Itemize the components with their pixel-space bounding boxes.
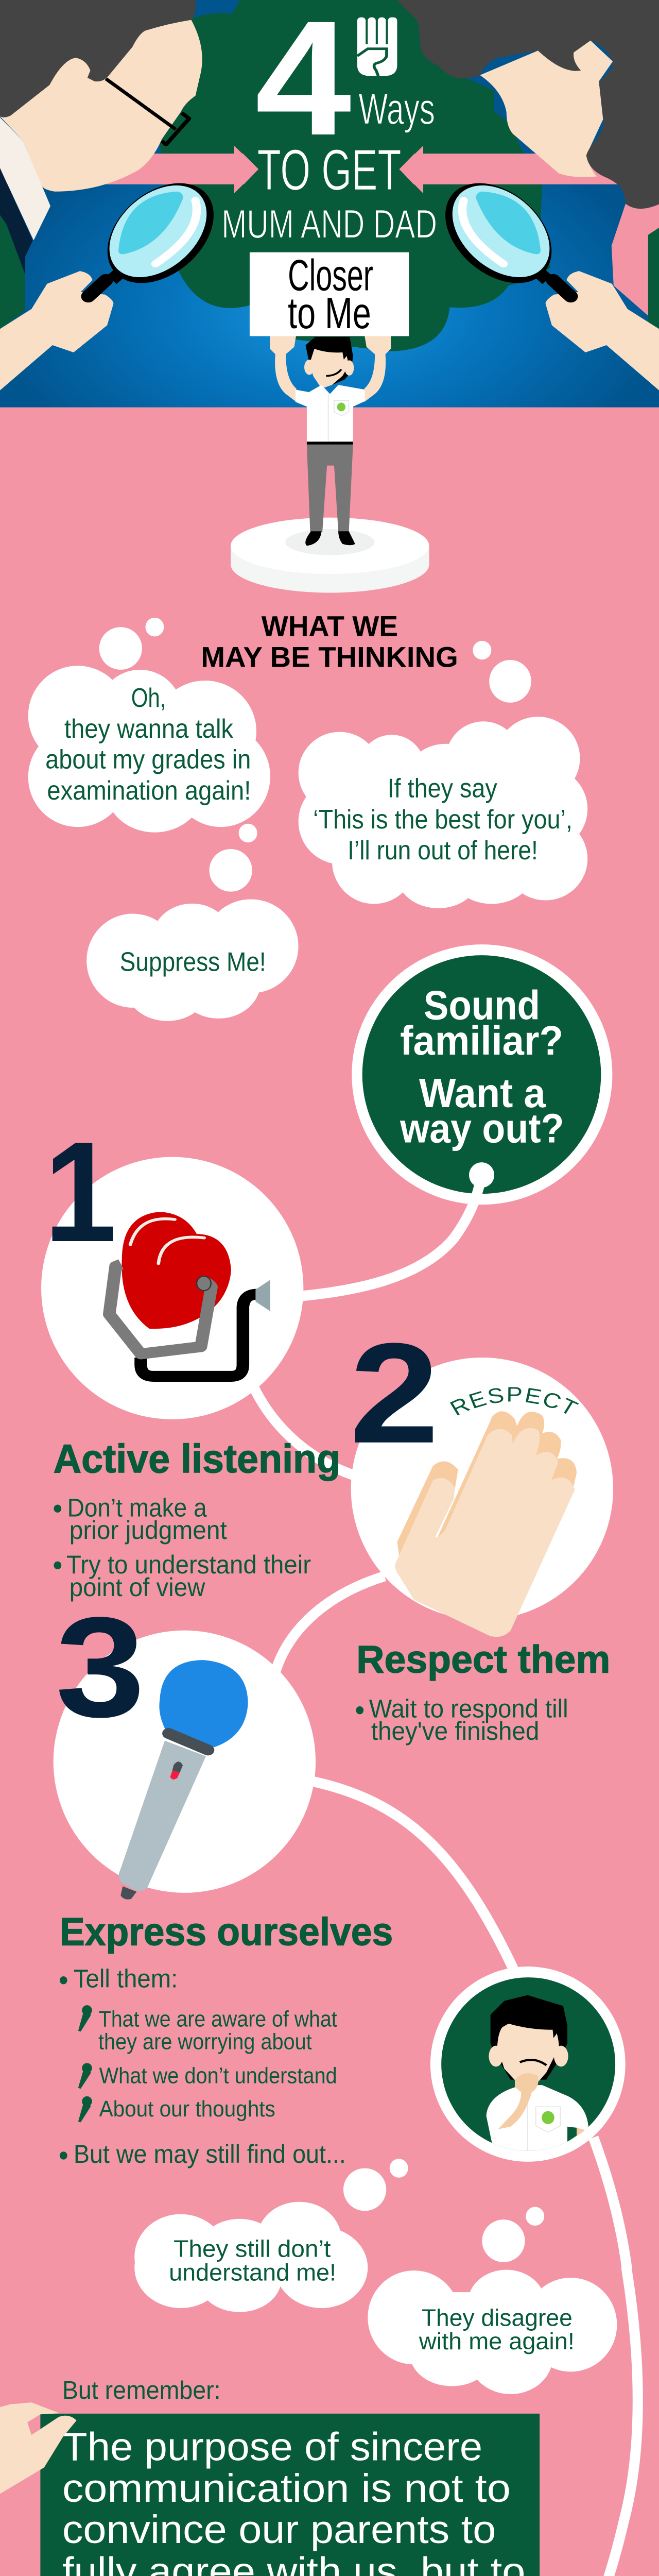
heading: active listening: Active listening [54, 1436, 340, 1481]
thought bubble: best for you [299, 641, 587, 908]
pink band [0, 154, 659, 184]
callout: sound familiar: familiar? [400, 1018, 563, 1064]
heading: WHAT WE [262, 611, 398, 642]
thought bubble: grades: about my grades in [45, 744, 251, 774]
panel: step 3 [54, 1587, 627, 2312]
text: but remember: But remember: [62, 2377, 221, 2404]
green message box: The purpose of sincere [62, 2424, 482, 2469]
sign [250, 250, 409, 337]
thought bubble: grades: they wanna talk [64, 714, 234, 743]
callout: sound familiar [352, 944, 612, 1205]
list: express ourselves: they are worrying about [98, 2029, 312, 2054]
connector 3 [313, 1782, 514, 1970]
boy holding sign [270, 334, 391, 546]
thought bubble: best for you: I’ll run out of here! [348, 835, 538, 865]
icon: respect hand: RESPECT [450, 1387, 579, 1416]
thought bubble: still don't understand: They still don’t [174, 2235, 331, 2262]
step 1 circle [41, 1157, 303, 1419]
hand left [0, 2402, 77, 2494]
step 3 number: 3 [56, 1587, 145, 1747]
green message box: communication is not to [62, 2466, 511, 2511]
father [0, 0, 202, 329]
icon: heart with stethoscope [109, 1212, 270, 1376]
mother [397, 0, 659, 332]
list: respect them: they've finished [371, 1716, 539, 1745]
list: active listening: point of view [70, 1572, 205, 1602]
connector dot [469, 1162, 494, 1188]
thought bubble: still don't understand [134, 2159, 408, 2312]
sign: to Me [288, 289, 371, 337]
list: express ourselves: About our thoughts [99, 2096, 275, 2121]
step 3 circle [54, 1631, 316, 1893]
green cloud [160, 0, 550, 351]
list: express ourselves [60, 1964, 346, 2168]
pedestal [231, 518, 429, 592]
panel: but remember [0, 2267, 659, 2576]
arrow left [234, 146, 258, 193]
icon: respect hand [395, 1387, 579, 1637]
heading [201, 611, 458, 673]
icon: mini mic [78, 2005, 92, 2031]
icon: microphone [118, 1660, 248, 1900]
heading: express ourselves: Express ourselves [60, 1910, 393, 1954]
thought bubble: disagree: They disagree [422, 2304, 573, 2331]
heading: respect them: Respect them [356, 1638, 610, 1681]
list: respect them: Wait to respond till [369, 1694, 568, 1723]
panel: what we may be thinking [28, 611, 612, 1205]
thought bubble dots: disagree [482, 2207, 544, 2262]
heading: MAY BE THINKING [201, 641, 458, 673]
thought bubble: suppress me: Suppress Me! [120, 946, 266, 976]
thought bubble: grades: Oh, [131, 683, 166, 713]
callout: sound familiar: way out? [400, 1106, 564, 1151]
magnifier and hand right [424, 165, 659, 391]
step 2 circle [351, 1358, 613, 1620]
list: active listening [54, 1493, 311, 1602]
callout: sound familiar: Want a [419, 1070, 546, 1116]
magnifier and hand left [0, 165, 235, 391]
arrow right [400, 146, 423, 193]
icon: mini mic [78, 2063, 92, 2089]
callout: sound familiar: Sound [424, 982, 540, 1028]
title: MUM AND DAD: MUM AND DAD [221, 202, 437, 246]
list: active listening: Don’t make a [67, 1493, 207, 1522]
blue background [0, 0, 659, 408]
sign: Closer [288, 250, 373, 300]
green message box: convince our parents to [62, 2507, 496, 2552]
green message box [40, 2414, 540, 2576]
list: express ourselves: What we don’t understand [99, 2063, 337, 2088]
thought bubble: grades: examination again! [47, 775, 251, 805]
step 2 number: 2 [350, 1313, 439, 1473]
title: Ways: Ways [358, 84, 435, 133]
step 1 number: 1 [44, 1112, 116, 1272]
connector 4 upper [594, 2138, 627, 2269]
connector 1 [254, 1180, 480, 1672]
list: respect them [356, 1694, 568, 1745]
panel: steps 1 and 2 [41, 1112, 613, 1681]
connector 4 lower [443, 2267, 638, 2576]
list: express ourselves: That we are aware of what [99, 2006, 337, 2031]
thought bubble: still don't understand: understand me! [169, 2259, 336, 2286]
thought bubble: suppress me [86, 824, 299, 1021]
icon: fist [357, 18, 397, 76]
thought bubble: best for you: ‘This is the best for you’, [313, 804, 573, 834]
list: active listening: prior judgment [70, 1515, 227, 1545]
thought bubble: disagree [368, 2270, 617, 2394]
green behind title text [234, 145, 423, 206]
thought bubble: disagree: with me again! [419, 2328, 575, 2354]
worried boy portrait [430, 1967, 626, 2162]
thought bubble: best for you: If they say [388, 773, 497, 803]
list: active listening: Try to understand their [66, 1550, 311, 1579]
thought bubble: grades [28, 618, 270, 833]
panel: header [0, 0, 659, 592]
list: express ourselves: Tell them: [74, 1964, 178, 1993]
title: TO GET: TO GET [257, 138, 402, 202]
icon: mini mic [78, 2096, 92, 2122]
list: express ourselves: But we may still find out... [74, 2139, 346, 2168]
